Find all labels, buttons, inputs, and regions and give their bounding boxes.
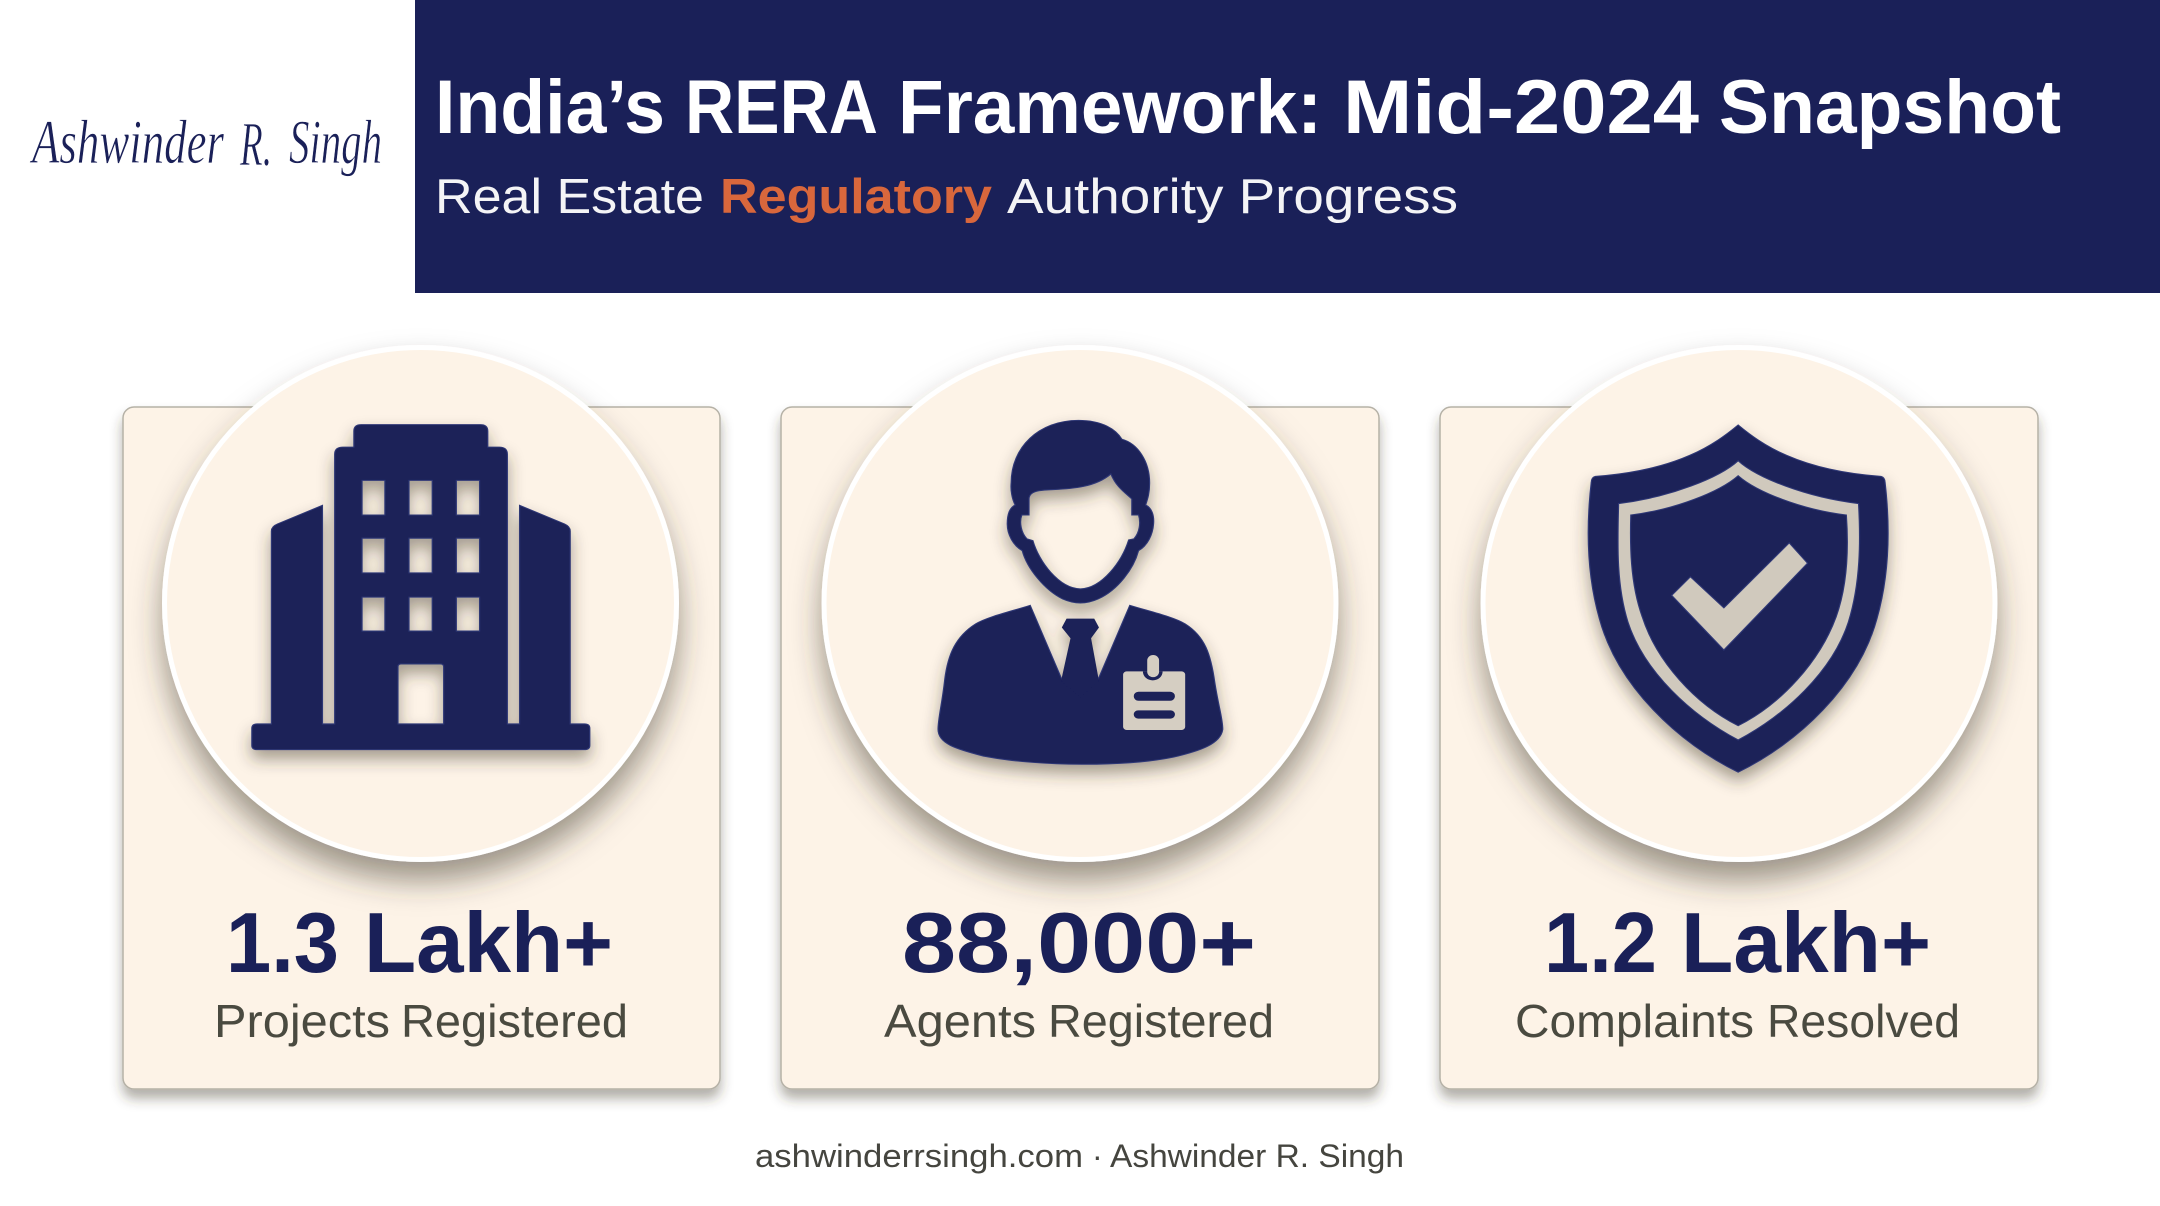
signature: Singh [289,109,382,177]
signature: Ashwinder [29,109,225,177]
stat label: Complaints [1515,995,1754,1047]
stat label: Resolved [1767,995,1960,1047]
title: RERA [685,65,878,150]
stat value: 1.2 [1544,896,1657,991]
icon circle [824,348,1336,860]
stat label: Registered [401,995,628,1047]
icon: shield with check mark [1588,425,1888,772]
title: India’s [435,65,665,150]
title: Snapshot [1719,65,2061,150]
icon: agent with badge [938,420,1223,764]
title: Mid-2024 [1343,65,1699,150]
icon circle [164,348,676,860]
card background [123,407,720,1089]
panel: complaints resolved [1440,348,2038,1089]
icon: office building [252,425,590,750]
panel: agents registered [781,348,1379,1089]
stat value: Lakh+ [1681,896,1931,991]
stat label: Agents [884,995,1036,1047]
stat value: 88,000+ [902,896,1256,991]
card background [781,407,1379,1089]
stat label: Projects [214,995,390,1047]
footer credit: Ashwinder R. Singh [1110,1138,1404,1174]
subtitle: Regulatory [720,170,992,224]
title: Framework: [898,65,1322,150]
stat label: Registered [1048,995,1274,1047]
footer credit: · [1092,1138,1103,1174]
subtitle: Real Estate [435,170,704,224]
panel: projects registered [123,348,720,1089]
stat value: 1.3 [226,896,339,991]
footer credit: ashwinderrsingh.com [755,1138,1083,1174]
signature: R. [239,111,272,179]
icon circle [1483,348,1995,860]
header banner [415,0,2160,293]
subtitle: Authority Progress [1007,170,1458,224]
stat value: Lakh+ [364,896,613,991]
card background [1440,407,2038,1089]
